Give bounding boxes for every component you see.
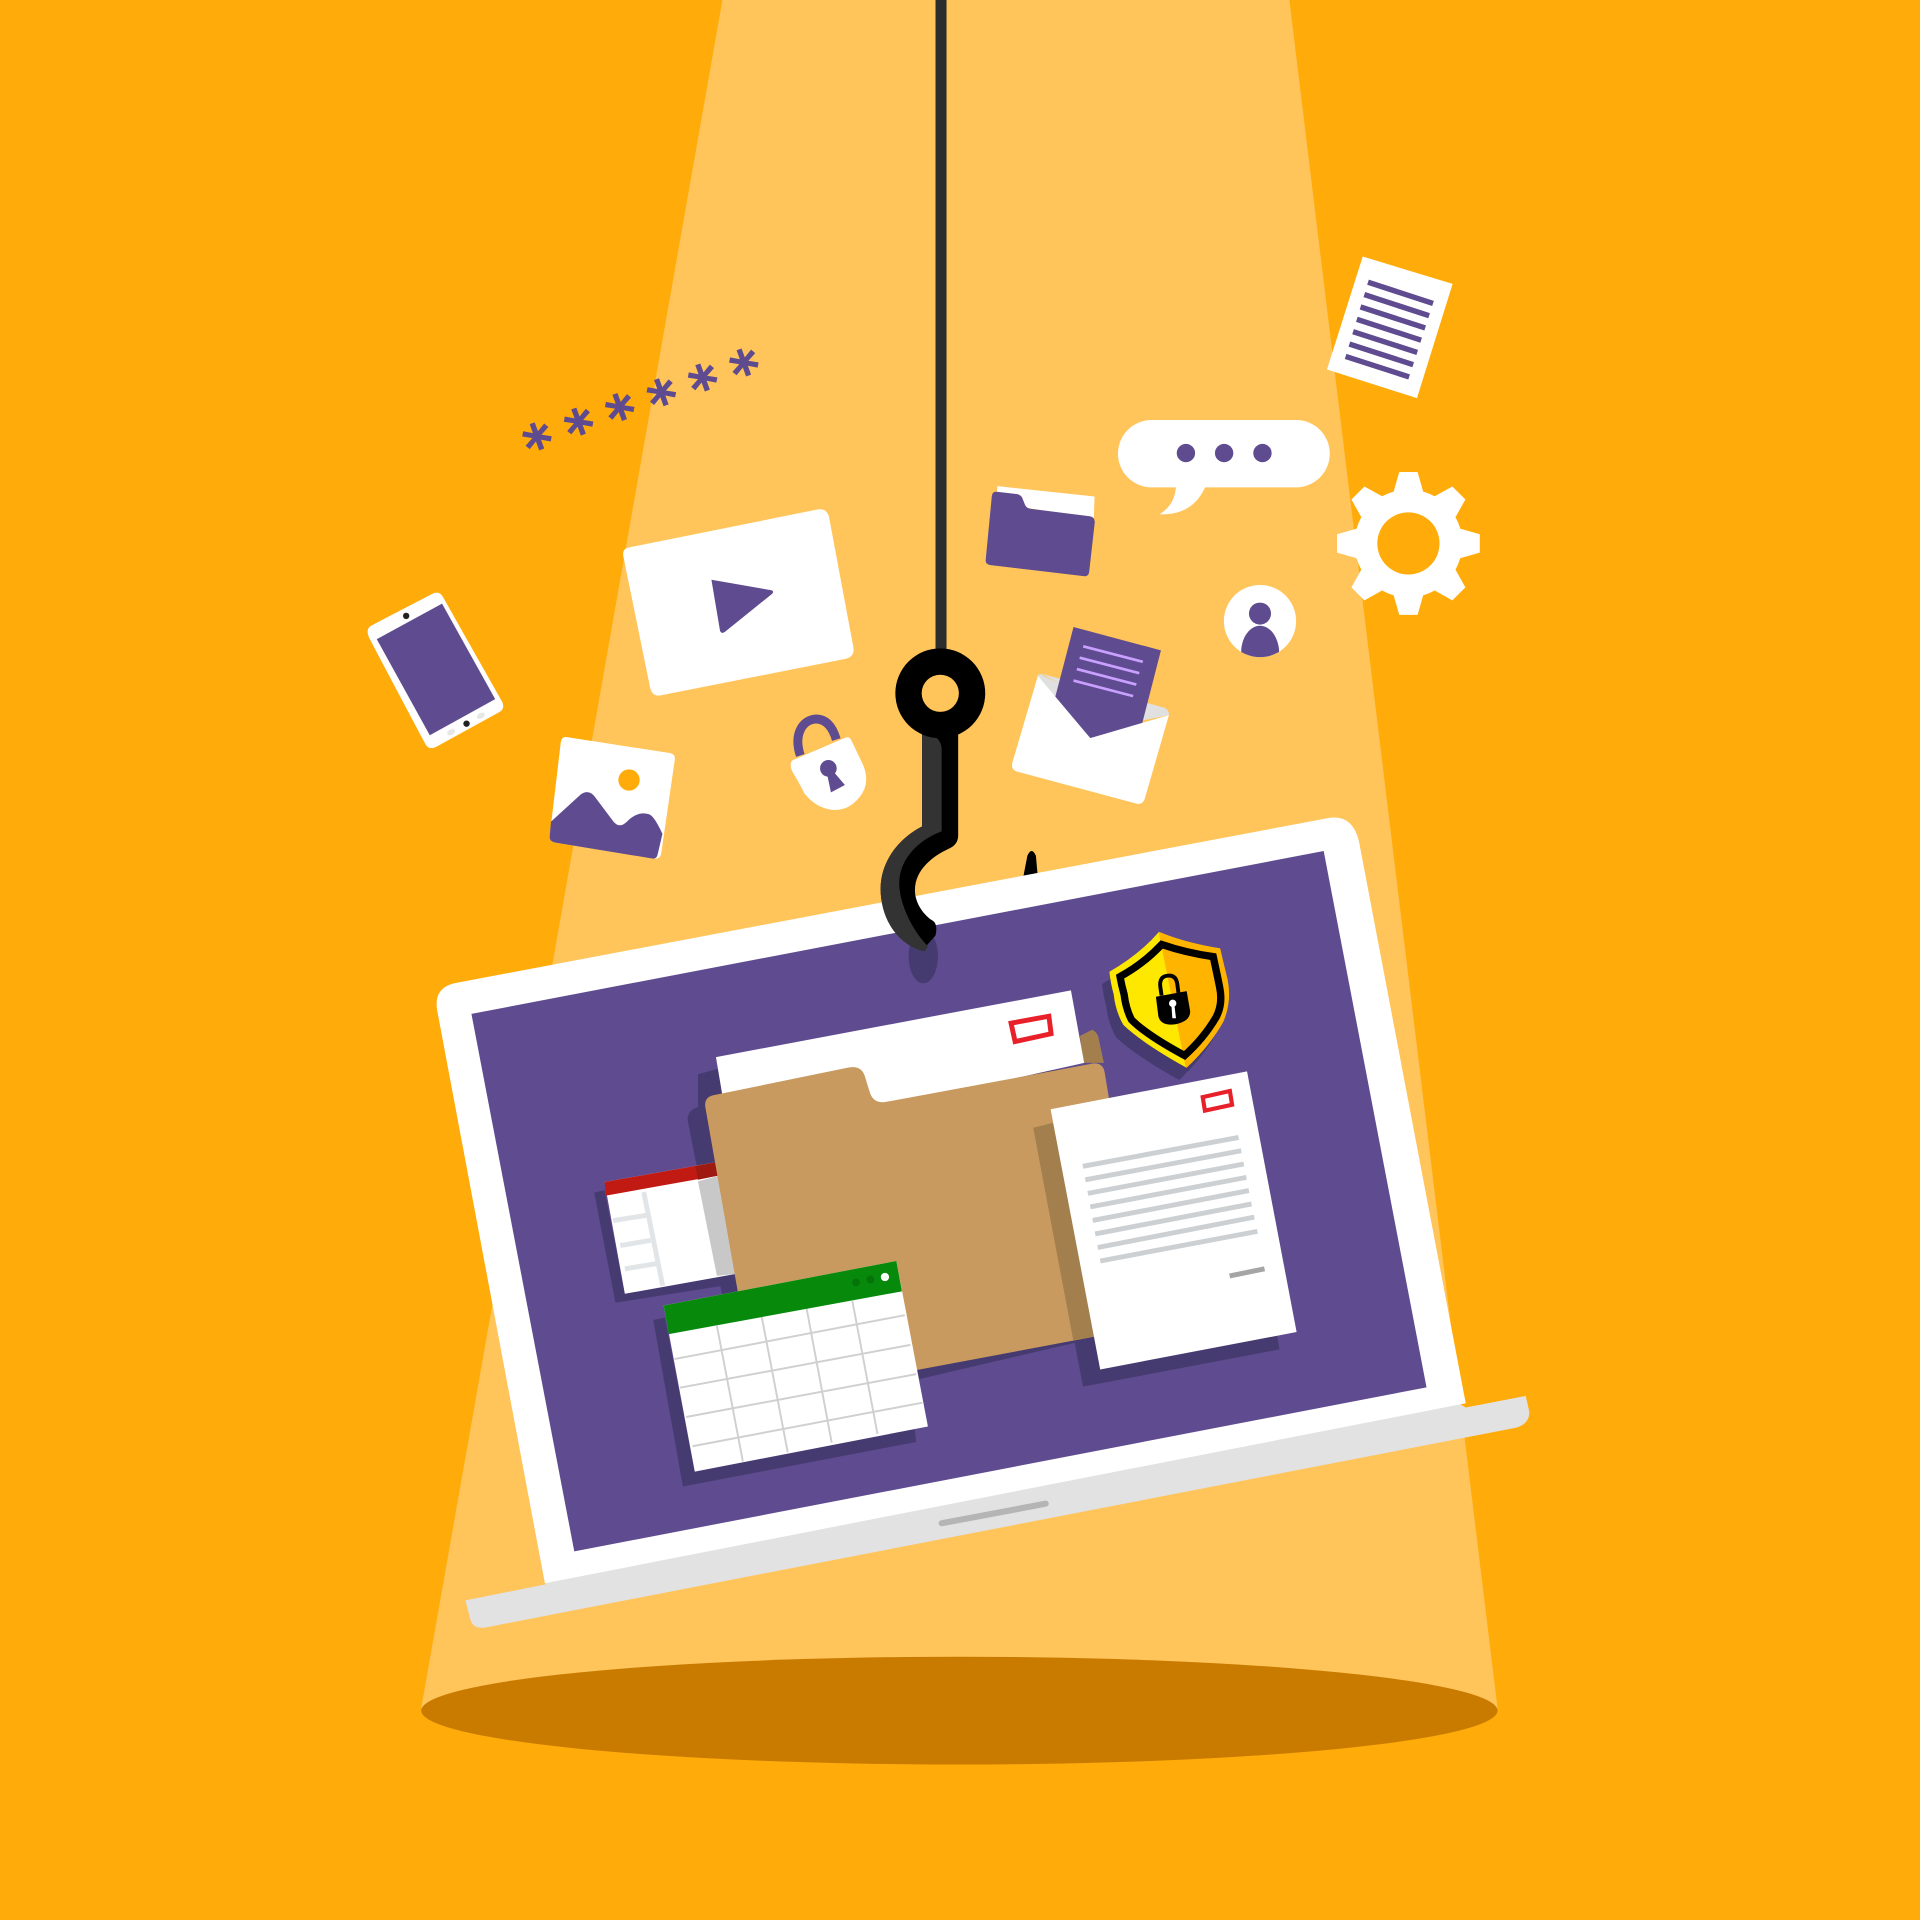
padlock on shield bbox=[1156, 976, 1190, 1025]
shield with padlock bbox=[1102, 932, 1229, 1080]
laptop screen bbox=[471, 851, 1427, 1551]
folder shadow bbox=[688, 1065, 1109, 1408]
icon: document with lines bbox=[1327, 257, 1453, 398]
document shadow on screen bbox=[1033, 1089, 1280, 1387]
red window bbox=[594, 1162, 740, 1303]
password asterisks bbox=[516, 337, 772, 481]
laptop base bbox=[465, 1396, 1529, 1628]
icon: envelope with letter bbox=[1012, 627, 1169, 804]
icon: phone bbox=[368, 593, 503, 748]
illustration: phishing hook lifting a laptop bbox=[368, 0, 1530, 1764]
fishing line bbox=[936, 0, 947, 661]
icon: gear bbox=[1337, 472, 1480, 615]
ground shadow ellipse bbox=[421, 1657, 1498, 1764]
icon: user avatar bbox=[1224, 585, 1296, 661]
folder with letter bbox=[705, 990, 1109, 1400]
letter document bbox=[1051, 1071, 1297, 1369]
password asterisks: * bbox=[558, 396, 606, 467]
icon: padlock bbox=[791, 719, 866, 810]
icon: picture bbox=[550, 737, 675, 859]
icon: folder bbox=[986, 486, 1095, 576]
green spreadsheet bbox=[653, 1261, 928, 1487]
folder back tab bbox=[1080, 1030, 1104, 1063]
document shadow on folder bbox=[1033, 1123, 1095, 1340]
password asterisks: * bbox=[599, 381, 648, 452]
password asterisks: * bbox=[723, 337, 772, 408]
fishing hook bbox=[881, 648, 985, 951]
icon: video player bbox=[623, 509, 854, 696]
spotlight beam bbox=[421, 0, 1498, 1708]
hook shadow bbox=[909, 929, 938, 983]
laptop bbox=[437, 818, 1529, 1628]
hook ring bbox=[895, 648, 985, 738]
folder front bbox=[705, 1063, 1109, 1400]
hook black body bbox=[881, 722, 958, 947]
laptop lid bbox=[437, 818, 1466, 1583]
password asterisks: * bbox=[682, 352, 731, 423]
letter in folder bbox=[716, 990, 1084, 1108]
laptop trackpad notch bbox=[942, 1504, 1046, 1523]
password asterisks: * bbox=[516, 411, 565, 481]
password asterisks: * bbox=[641, 367, 689, 437]
icon: chat bubble bbox=[1118, 420, 1330, 514]
hook grey highlight bbox=[881, 732, 942, 951]
hook barb behind laptop bbox=[1023, 851, 1038, 877]
